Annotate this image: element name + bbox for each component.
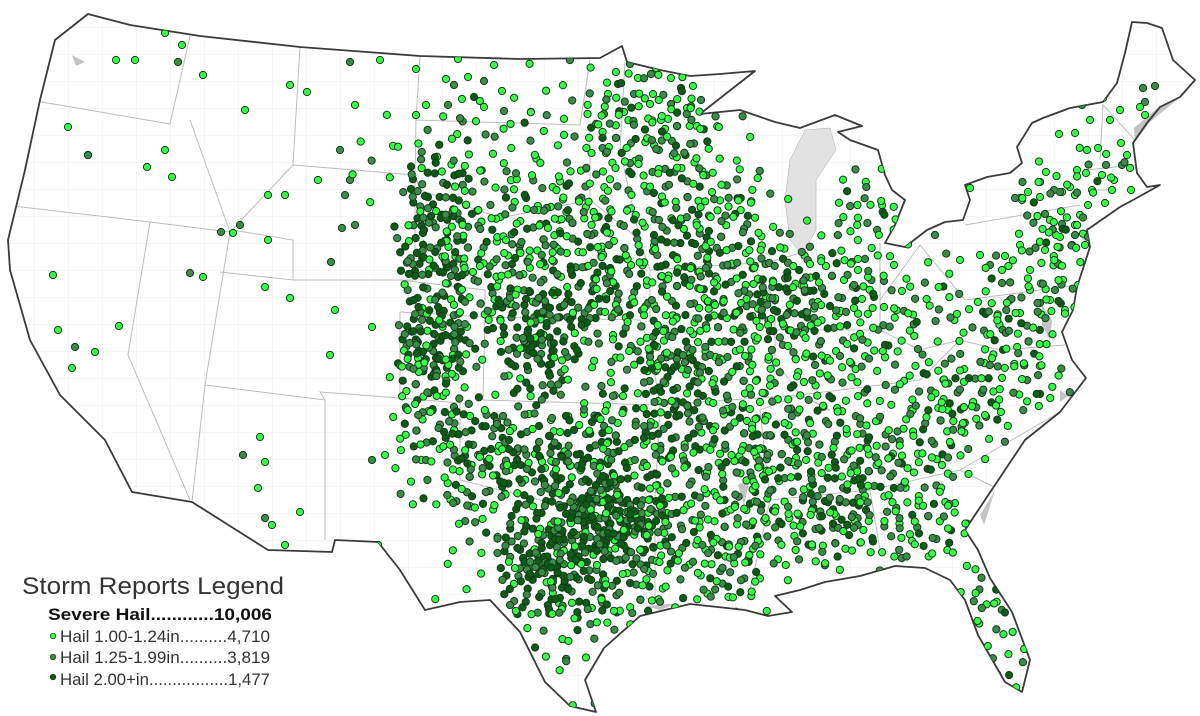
state borders bbox=[13, 36, 1135, 600]
lake michigan bbox=[785, 128, 836, 255]
legend bbox=[22, 573, 284, 689]
legend item: hail 1.25-1.99in: Hail 1.25-1.99in..........3,819 bbox=[60, 648, 270, 667]
coastal bays and estuaries bbox=[72, 55, 1178, 610]
legend total: Severe Hail............10,006 bbox=[48, 605, 272, 624]
legend item: hail 2.00+in: Hail 2.00+in.................1,477 bbox=[60, 670, 270, 689]
legend title: Storm Reports Legend bbox=[22, 573, 284, 600]
legend item: hail 1.00-1.24in: Hail 1.00-1.24in..........4,710 bbox=[60, 627, 270, 646]
